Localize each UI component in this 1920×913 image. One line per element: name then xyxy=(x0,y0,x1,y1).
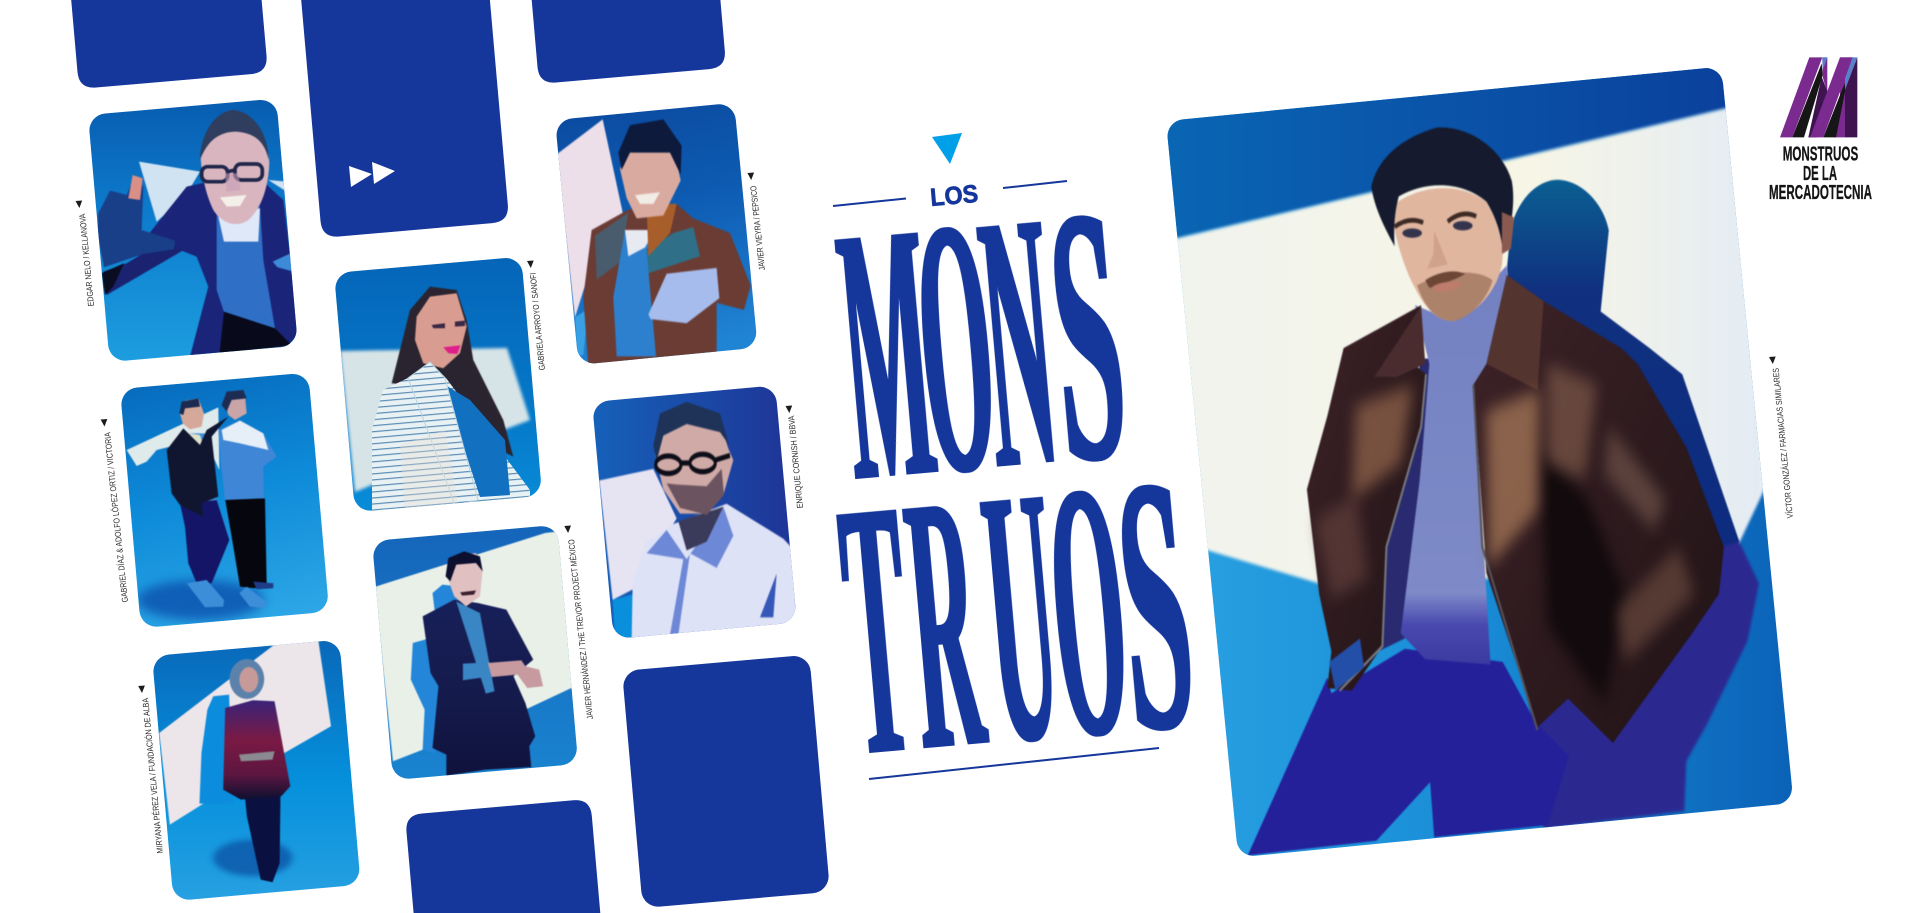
photo: Miryana Pérez Vela xyxy=(153,641,360,900)
label: Víctor González: VÍCTOR GONZÁLEZ / FARMACIAS SIMILARES xyxy=(1771,367,1795,519)
icon: M mark xyxy=(1780,57,1857,137)
label: Javier Vieyra: JAVIER VIEYRA / PEPSICO xyxy=(748,185,767,271)
photo: Enrique Cornish xyxy=(593,386,796,638)
label: Gabriel Díaz and Adolfo López Ortiz: GABRIEL DÍAZ & ADOLFO LÓPEZ ORTIZ / VICTORIA xyxy=(102,432,130,603)
logo text: MONSTRUOS xyxy=(1783,144,1858,166)
word: Mons: S xyxy=(1037,131,1138,541)
label: Javier Hernández: JAVIER HERNÁNDEZ / THE TREVOR PROJECT MÉXICO xyxy=(566,539,595,720)
word: Truos: TRUO xyxy=(829,404,1141,833)
photo: Víctor González hero xyxy=(1150,50,1810,870)
figure: sweater xyxy=(1401,265,1510,665)
icon: blue triangle xyxy=(932,133,962,164)
photo: Gabriel Díaz and Adolfo López Ortiz xyxy=(121,374,328,627)
word: Mons: MON xyxy=(827,135,1068,558)
icon: fast-forward arrows xyxy=(349,162,395,187)
figure: hair xyxy=(1371,127,1513,251)
label: Enrique Cornish: ENRIQUE CORNISH / BBVA xyxy=(786,415,805,509)
photo: Edgar Nelo xyxy=(89,100,296,361)
figure: jacket left xyxy=(1307,305,1426,691)
blue panel: bottom right xyxy=(622,655,830,908)
blue panel: bottom centre xyxy=(406,800,600,913)
photo: Javier Vieyra xyxy=(556,104,756,364)
figure: man xyxy=(1248,127,1724,855)
blue panel: top left xyxy=(71,0,267,88)
photo: Javier Hernández xyxy=(373,526,577,779)
label: Gabriela Arroyo: GABRIELA ARROYO / SANOFI xyxy=(528,272,547,371)
label: Miryana Pérez Vela: MIRYANA PÉREZ VELA / FUNDACIÓN DE ALBA xyxy=(140,697,165,854)
figure: jacket right xyxy=(1473,275,1724,743)
photo: Gabriela Arroyo xyxy=(335,258,541,511)
logo: Monstruos de la Mercadotecnia: DE LA xyxy=(1803,163,1837,185)
logo: Monstruos de la Mercadotecnia xyxy=(1769,57,1872,204)
title block: Los Monstruos xyxy=(827,129,1206,834)
blue panel with fast-forward arrows xyxy=(301,0,508,237)
word: Truos: S xyxy=(1105,400,1206,810)
label: Edgar Nelo: EDGAR NELO / KELLANOVA xyxy=(77,213,96,307)
word: Los: LOS xyxy=(929,180,979,212)
figure: head xyxy=(1391,188,1503,321)
blue panel: top centre xyxy=(532,0,725,83)
figure: trousers xyxy=(1248,649,1569,855)
